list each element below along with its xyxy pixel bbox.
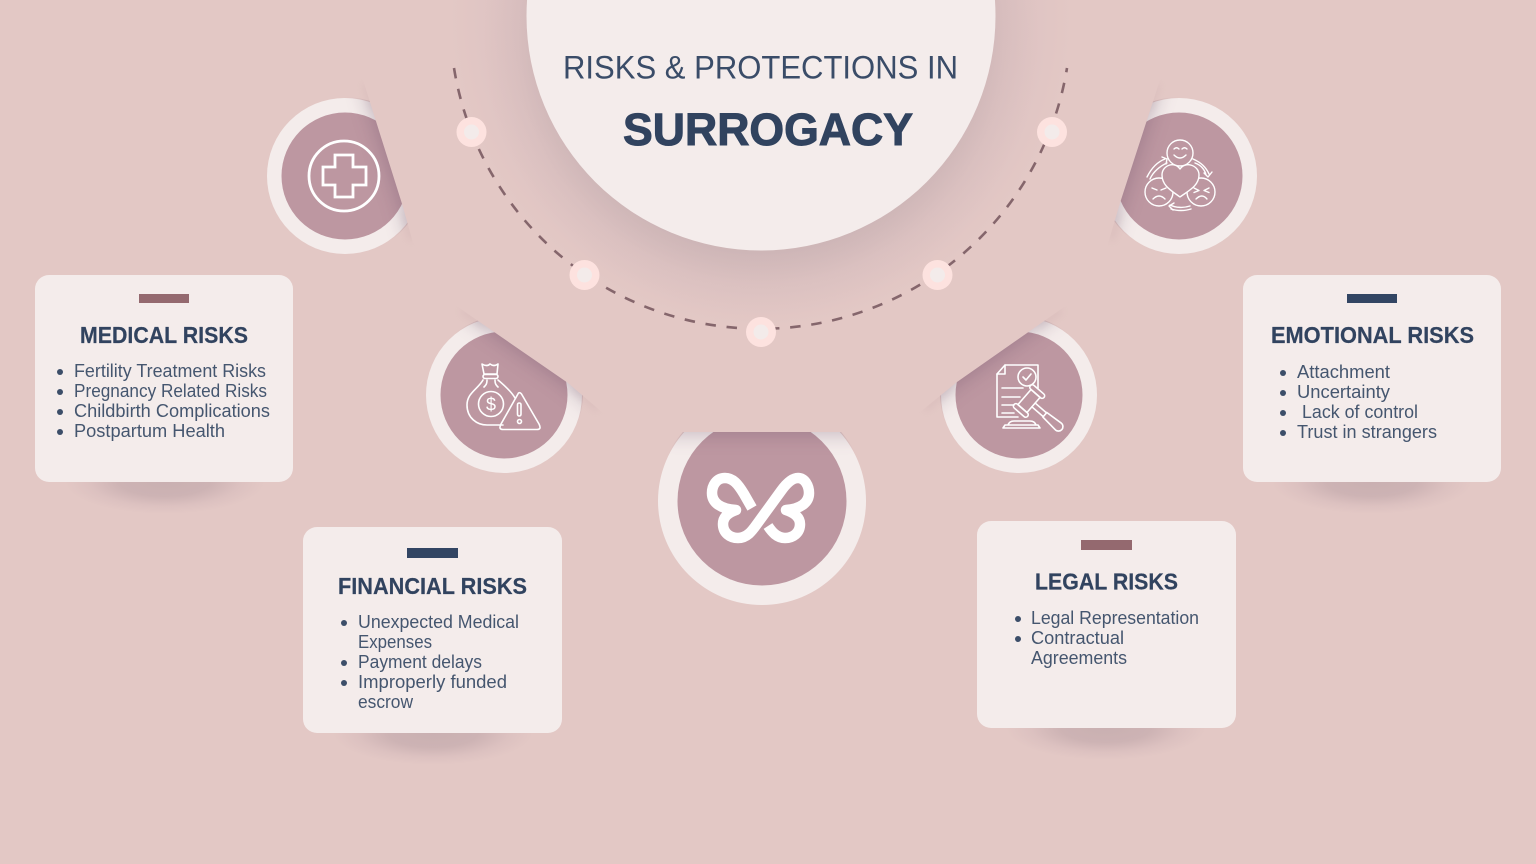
panel: financial risks: Unexpected Medical: [358, 612, 519, 632]
icon: butterfly logo: [712, 478, 809, 538]
panel: financial risks: escrow: [358, 692, 414, 712]
panel: legal risks: Agreements: [1031, 648, 1127, 668]
icon: contract and gavel: [997, 365, 1072, 441]
panel: legal risks: Contractual: [1031, 628, 1124, 648]
panel: medical risks: Childbirth Complications: [74, 401, 270, 421]
icon: money bag and warning: [467, 364, 540, 430]
panel: emotional risks: EMOTIONAL RISKS: [1271, 322, 1474, 348]
central logo badge: [658, 397, 866, 605]
medical risks badge: [267, 98, 423, 254]
title: SURROGACY: [623, 104, 913, 155]
central title disc: [526, 0, 996, 250]
panel: medical risks: Pregnancy Related Risks: [74, 381, 267, 401]
panel: legal risks: [977, 521, 1236, 760]
title: RISKS & PROTECTIONS IN: [563, 50, 958, 86]
panel: emotional risks: [1243, 275, 1501, 514]
panel: medical risks: Postpartum Health: [74, 421, 225, 441]
panel: medical risks: [35, 275, 293, 514]
panel: medical risks: Fertility Treatment Risks: [74, 361, 266, 381]
panel: emotional risks: Uncertainty: [1297, 382, 1390, 402]
icon: money bag and warning: $: [486, 394, 496, 414]
icon: emotions cycle: [1145, 140, 1215, 210]
title: [563, 50, 958, 155]
panel: financial risks: Payment delays: [358, 652, 482, 672]
panel: emotional risks: Lack of control: [1302, 402, 1418, 422]
panel: financial risks: [303, 527, 562, 765]
legal risks badge: [941, 317, 1097, 473]
icon: medical cross: [309, 141, 379, 211]
emotional risks badge: [1101, 98, 1257, 254]
panel: emotional risks: Attachment: [1297, 362, 1390, 382]
panel: financial risks: Expenses: [358, 632, 432, 652]
panel: financial risks: FINANCIAL RISKS: [338, 573, 527, 599]
panel: emotional risks: Trust in strangers: [1297, 422, 1437, 442]
panel: medical risks: MEDICAL RISKS: [80, 322, 248, 348]
financial risks badge: [426, 317, 582, 473]
arc node dots: [456, 117, 1067, 347]
panel: legal risks: Legal Representation: [1031, 608, 1199, 628]
dashed arc: [454, 68, 1067, 329]
panel: financial risks: Improperly funded: [358, 672, 507, 692]
panel: legal risks: LEGAL RISKS: [1035, 568, 1178, 594]
